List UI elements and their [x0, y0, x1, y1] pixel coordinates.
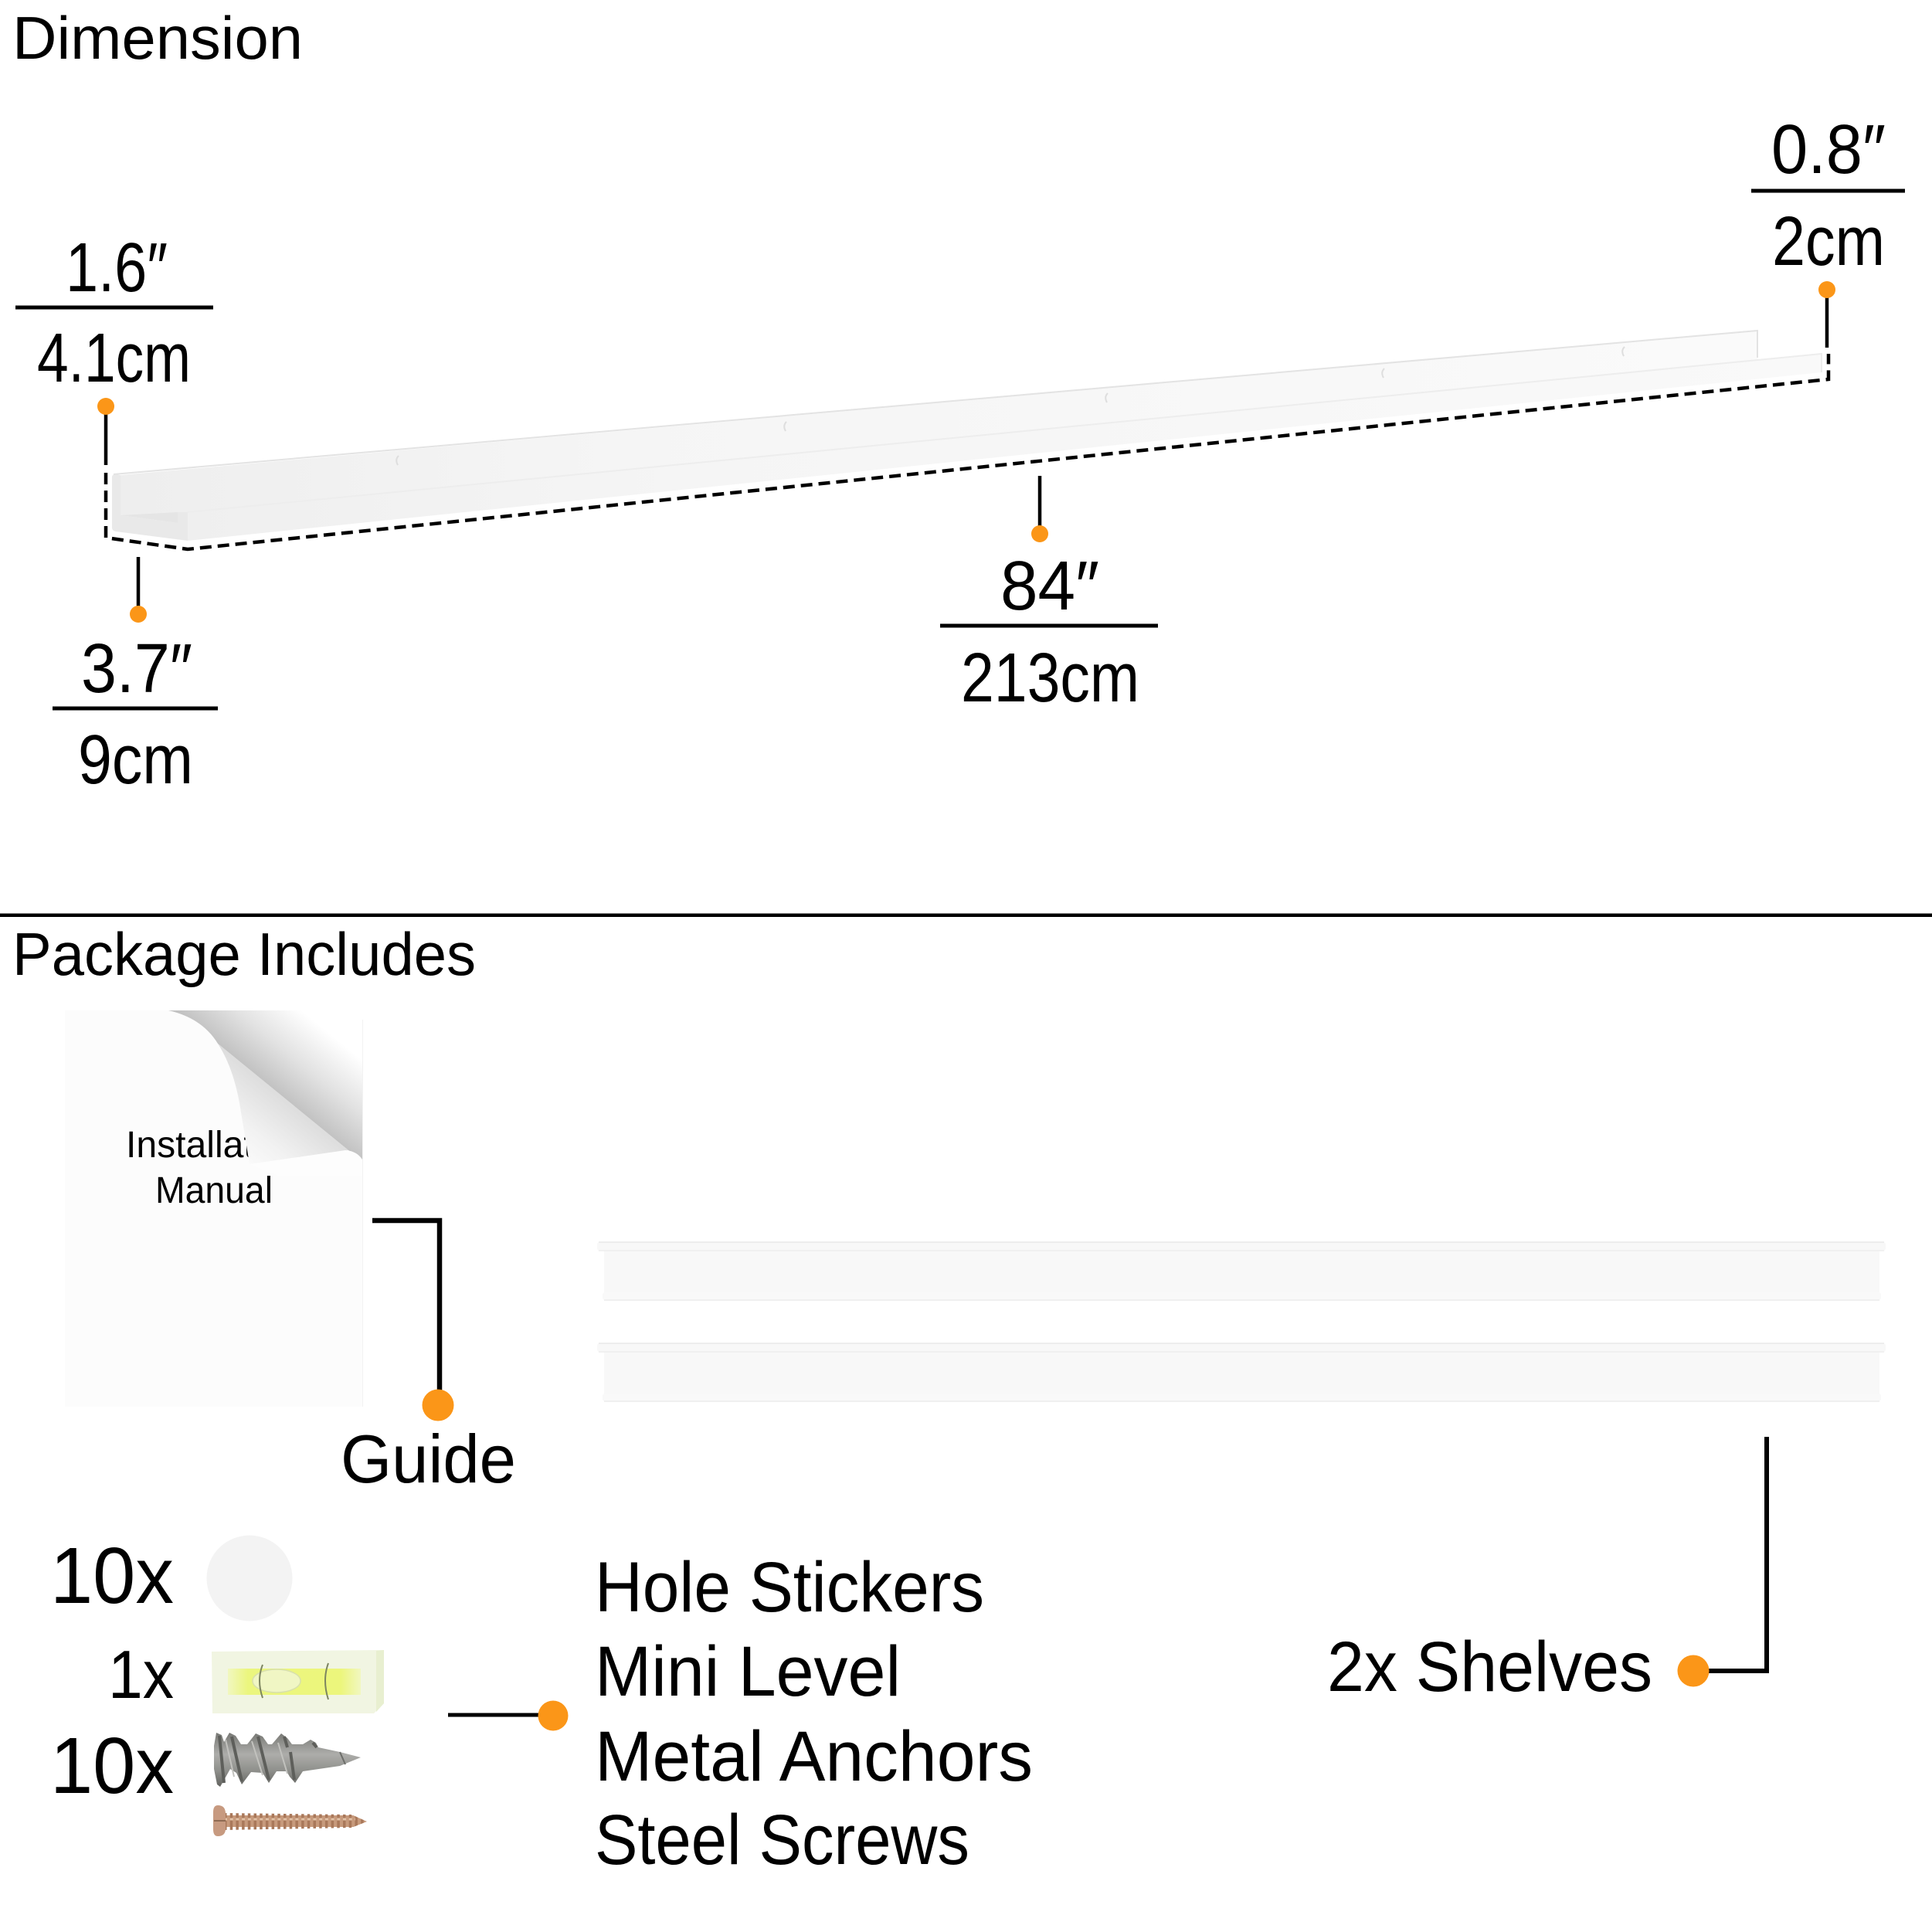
- callout: lip height 0.8 in: 2cm: [1772, 203, 1885, 280]
- callout: shelf depth 3.7 in: 3.7″: [81, 630, 192, 708]
- quantity: 10x anchors and screws: 10x: [50, 1721, 174, 1810]
- quantity: 1x mini level: 1x: [108, 1636, 174, 1713]
- callout: shelf depth 3.7 in: [53, 557, 218, 799]
- small parts list: Metal Anchors: [595, 1717, 1033, 1796]
- marker: shelves: [1678, 1655, 1709, 1687]
- small parts list: Mini Level: [595, 1632, 901, 1711]
- connector: shelves: [1699, 1437, 1767, 1671]
- heading: Dimension: Dimension: [12, 4, 303, 72]
- icon: hole sticker: [207, 1536, 292, 1621]
- label: 2x Shelves: 2x Shelves: [1327, 1628, 1652, 1706]
- installation manual with page curl: [65, 1010, 363, 1407]
- callout: shelf height 1.6 in: 1.6″: [66, 229, 168, 307]
- connector: small parts: [448, 1713, 541, 1716]
- section divider: [0, 913, 1932, 917]
- installation manual with page curl: Manual: [155, 1170, 273, 1211]
- connector: guide: [372, 1221, 440, 1398]
- dashed dimension outline: [106, 354, 1828, 549]
- heading: Package Includes: Package Includes: [12, 920, 476, 988]
- callout: lip height 0.8 in: 0.8″: [1771, 111, 1886, 188]
- small parts list: Steel Screws: [595, 1801, 969, 1879]
- icon: metal anchor: [214, 1733, 361, 1787]
- callout: shelf length 84 in: [940, 476, 1158, 717]
- callout: lip height 0.8 in: [1751, 111, 1905, 348]
- callout: shelf depth 3.7 in: 9cm: [78, 722, 193, 799]
- shelf front view 2: [597, 1343, 1886, 1401]
- label: Guide: Guide: [341, 1421, 516, 1497]
- small parts list: [595, 1548, 1033, 1879]
- shelf illustration: angled view: [112, 331, 1822, 541]
- callout: shelf height 1.6 in: 4.1cm: [37, 320, 191, 397]
- callout: shelf length 84 in: 84″: [1000, 548, 1099, 625]
- quantity: 10x hole stickers: 10x: [50, 1531, 174, 1620]
- marker: small parts: [538, 1701, 569, 1730]
- icon: mini level: [212, 1650, 384, 1713]
- marker: guide: [422, 1389, 454, 1421]
- icon: steel screw: [213, 1805, 369, 1836]
- callout: shelf length 84 in: 213cm: [961, 640, 1139, 717]
- shelf front view 1: [597, 1242, 1886, 1300]
- small parts list: Hole Stickers: [595, 1548, 984, 1627]
- installation manual with page curl: Installation: [126, 1125, 304, 1166]
- callout: shelf height 1.6 in: [15, 229, 213, 465]
